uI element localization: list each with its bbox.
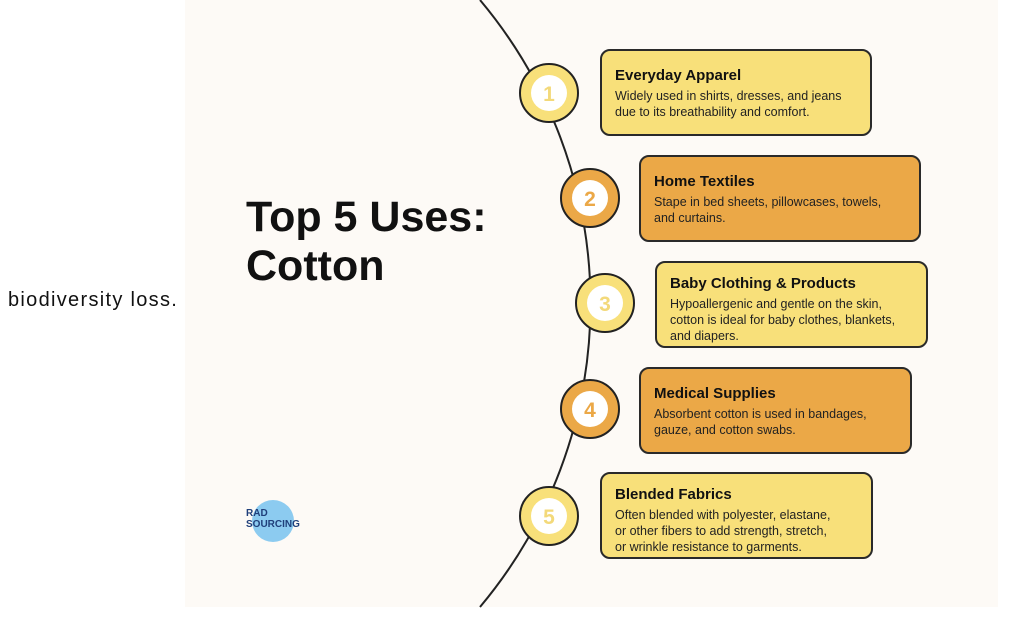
box 5: Blended Fabrics [615,486,732,503]
panel: main [185,0,998,607]
circle 4: 4 [584,399,596,422]
circle 2: 2 [584,188,596,211]
box 3: Baby Clothing & Products [670,275,856,292]
circle 3: 3 [599,293,611,316]
box 4: Absorbent cotton is used in bandages, gauze, and cotton swabs. [654,407,867,437]
title [246,193,487,290]
title: Cotton [246,242,384,290]
circle 1 [520,64,578,122]
box 5: Often blended with polyester, elastane, or other fibers to add strength, stretch, or wrinkle resistance to garments. [615,508,830,554]
box 3: Hypoallergenic and gentle on the skin, cotton is ideal for baby clothes, blankets, and diapers. [670,297,895,343]
circle 4 [561,380,619,438]
circle 2 [561,169,619,227]
title: Top 5 Uses: [246,193,487,241]
box 2 [639,155,921,242]
circle 5 [520,487,578,545]
logo: RAD [246,508,268,519]
logo: SOURCING [246,519,300,530]
logo [246,500,300,542]
box 2: Stape in bed sheets, pillowcases, towels, and curtains. [654,195,881,225]
box 4 [639,367,912,454]
side text: biodiversity loss. [8,289,178,311]
box 5 [600,472,873,559]
box 1: Everyday Apparel [615,67,741,84]
box 1 [600,49,872,136]
box 2: Home Textiles [654,173,755,190]
box 1: Widely used in shirts, dresses, and jeans due to its breathability and comfort. [615,89,842,119]
box 4: Medical Supplies [654,385,776,402]
circle 1: 1 [543,83,555,106]
box 3 [655,261,928,348]
circle 5: 5 [543,506,555,529]
circle 3 [576,274,634,332]
